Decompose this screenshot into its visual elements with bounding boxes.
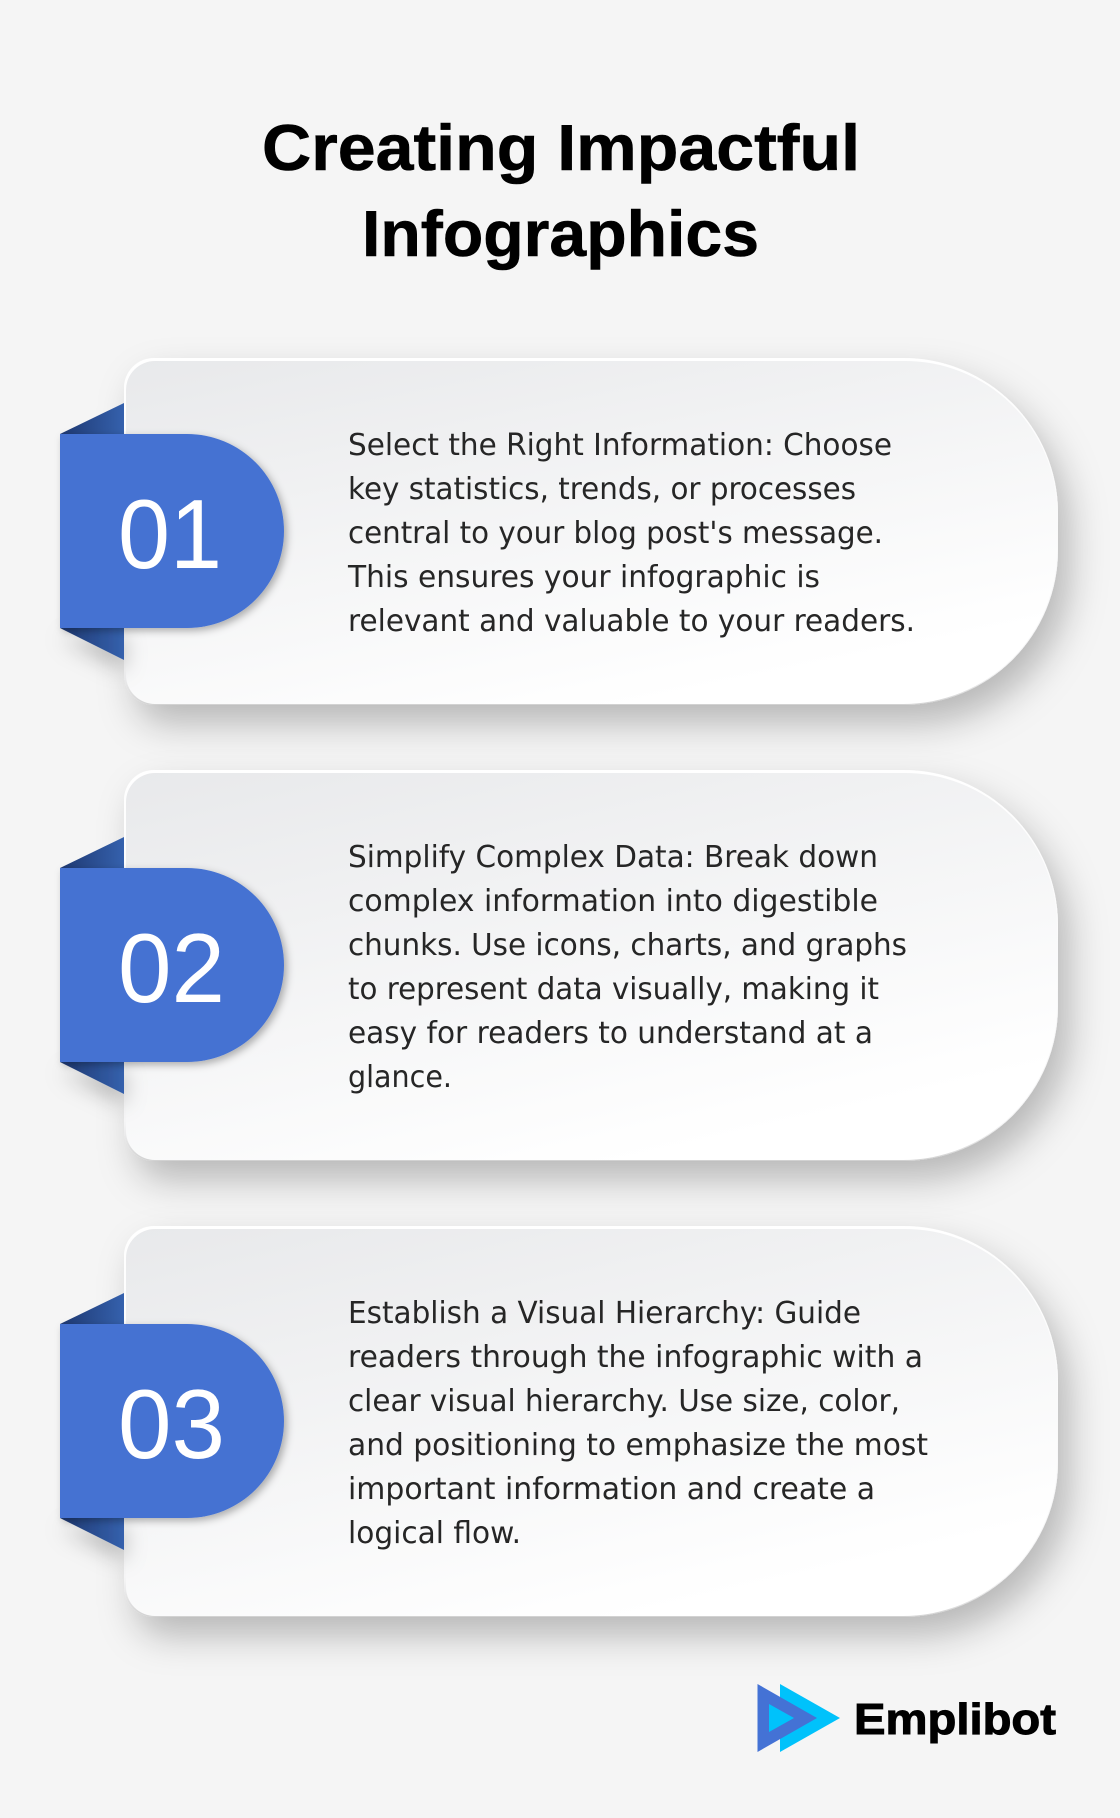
title: Infographics: [362, 197, 759, 270]
text block 02: to represent data visually, making it: [348, 972, 879, 1007]
text block 01: key statistics, trends, or processes: [348, 472, 856, 507]
text block 03: clear visual hierarchy. Use size, color,: [348, 1384, 900, 1419]
ribbon fold bottom: [60, 628, 124, 660]
text block 03: and positioning to emphasize the most: [348, 1428, 928, 1463]
number badge 02: 02: [118, 913, 225, 1023]
text block 03: logical flow.: [348, 1516, 521, 1551]
text block 03: readers through the infographic with a: [348, 1340, 923, 1375]
title: [262, 111, 860, 270]
text block 02: chunks. Use icons, charts, and graphs: [348, 928, 907, 963]
ribbon fold bottom: [60, 1518, 124, 1550]
text block 01: central to your blog post's message.: [348, 516, 883, 551]
text block 02: Simplify Complex Data: Break down: [348, 840, 878, 875]
card 03 background: [124, 1226, 1058, 1617]
text block 02: easy for readers to understand at a: [348, 1016, 873, 1051]
ribbon fold top: [60, 837, 124, 868]
text block 01: Select the Right Information: Choose: [348, 428, 892, 463]
logo: Emplibot: [758, 1684, 1056, 1752]
text block 01: relevant and valuable to your readers.: [348, 604, 915, 639]
text block 01: This ensures your infographic is: [347, 560, 820, 595]
text block 03: Establish a Visual Hierarchy: Guide: [348, 1296, 861, 1331]
number badge 03: [60, 1324, 284, 1518]
ribbon fold top: [60, 403, 124, 434]
number badge 01: 01: [118, 479, 222, 589]
card 01 background: [124, 358, 1058, 705]
icon: play triangles: [758, 1684, 840, 1752]
text block 02: [348, 840, 907, 1095]
number badge 01: [60, 434, 284, 628]
text block 03: important information and create a: [348, 1472, 875, 1507]
ribbon fold bottom: [60, 1062, 124, 1094]
text block 03: [348, 1296, 928, 1551]
text block 02: glance.: [348, 1060, 452, 1095]
ribbon fold top: [60, 1293, 124, 1324]
panel: step 01: [60, 358, 1058, 705]
number badge 02: [60, 868, 284, 1062]
text block 01: [347, 428, 915, 639]
panel: step 03: [60, 1226, 1058, 1617]
text block 02: complex information into digestible: [348, 884, 878, 919]
title: Creating Impactful: [262, 111, 860, 184]
number badge 03: 03: [118, 1369, 225, 1479]
wordmark: Emplibot: [854, 1695, 1056, 1744]
card 02 background: [124, 770, 1058, 1161]
panel: step 02: [60, 770, 1058, 1161]
